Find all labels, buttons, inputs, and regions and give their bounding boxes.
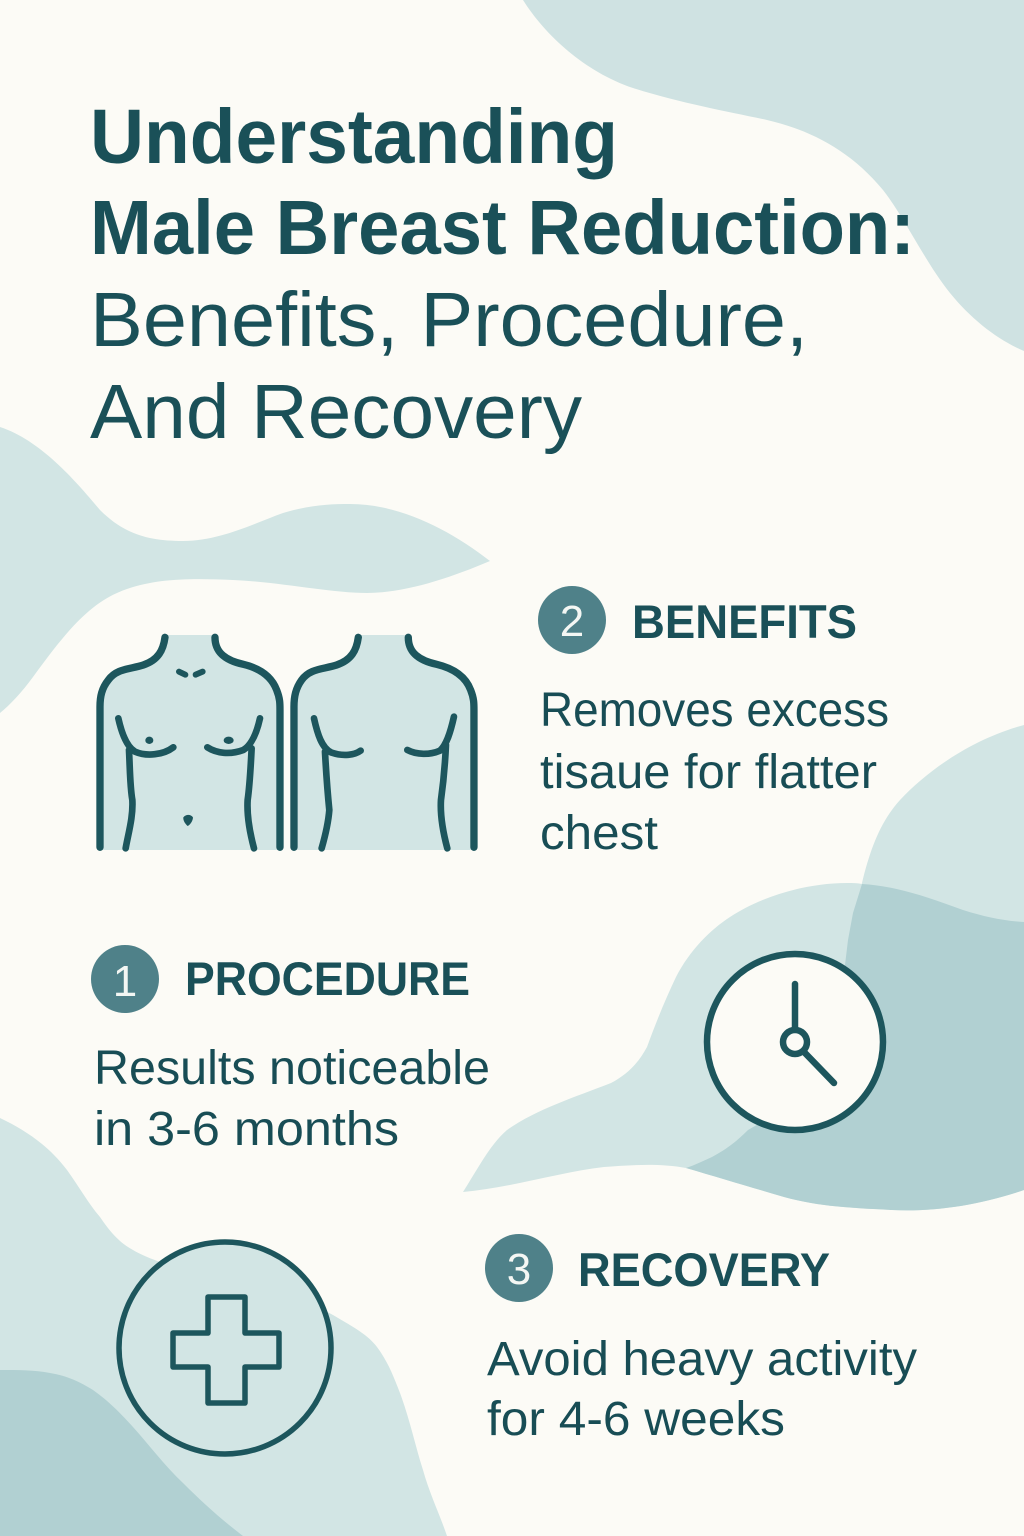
text: recovery description: Avoid heavy activity: [487, 1333, 917, 1386]
text: procedure description: in 3-6 months: [94, 1103, 399, 1156]
badge 3: 3: [507, 1245, 531, 1294]
background blob: middle left: [0, 427, 490, 713]
section: benefits: [538, 586, 889, 860]
background blob: right lower: [463, 883, 1024, 1210]
heading: recovery: RECOVERY: [578, 1243, 830, 1296]
title: Understanding: [90, 94, 618, 180]
badge 2: 2: [560, 597, 584, 646]
background blob: bottom left: [0, 1118, 447, 1536]
background blob: right overlap: [686, 884, 1024, 1210]
title: [90, 94, 915, 455]
background blob: bottom left dark: [0, 1370, 243, 1536]
text: recovery description: [487, 1333, 917, 1446]
text: benefits description: tisaue for flatter: [540, 746, 877, 799]
torso: after: [294, 635, 474, 850]
text: recovery description: for 4-6 weeks: [487, 1393, 785, 1446]
heading: benefits: BENEFITS: [632, 595, 857, 648]
icon: clock: [707, 954, 883, 1130]
section: recovery: [485, 1234, 917, 1446]
badge 1: 1: [113, 957, 137, 1006]
icon: before and after torsos: [100, 635, 474, 850]
title: Male Breast Reduction:: [90, 185, 915, 271]
torso: before: [100, 635, 280, 850]
badge 2: [538, 586, 606, 654]
text: benefits description: [540, 684, 889, 860]
text: benefits description: chest: [540, 807, 658, 860]
title: And Recovery: [90, 369, 583, 455]
text: benefits description: Removes excess: [540, 684, 889, 737]
badge 3: [485, 1234, 553, 1302]
text: procedure description: Results noticeable: [94, 1042, 490, 1095]
icon: medical cross: [119, 1242, 331, 1454]
background blob: right upper: [845, 725, 1024, 1000]
heading: procedure: PROCEDURE: [185, 952, 470, 1005]
badge 1: [91, 945, 159, 1013]
title: Benefits, Procedure,: [90, 277, 808, 363]
text: procedure description: [94, 1042, 490, 1156]
section: procedure: [91, 945, 490, 1156]
background blob: top right: [523, 0, 1024, 351]
